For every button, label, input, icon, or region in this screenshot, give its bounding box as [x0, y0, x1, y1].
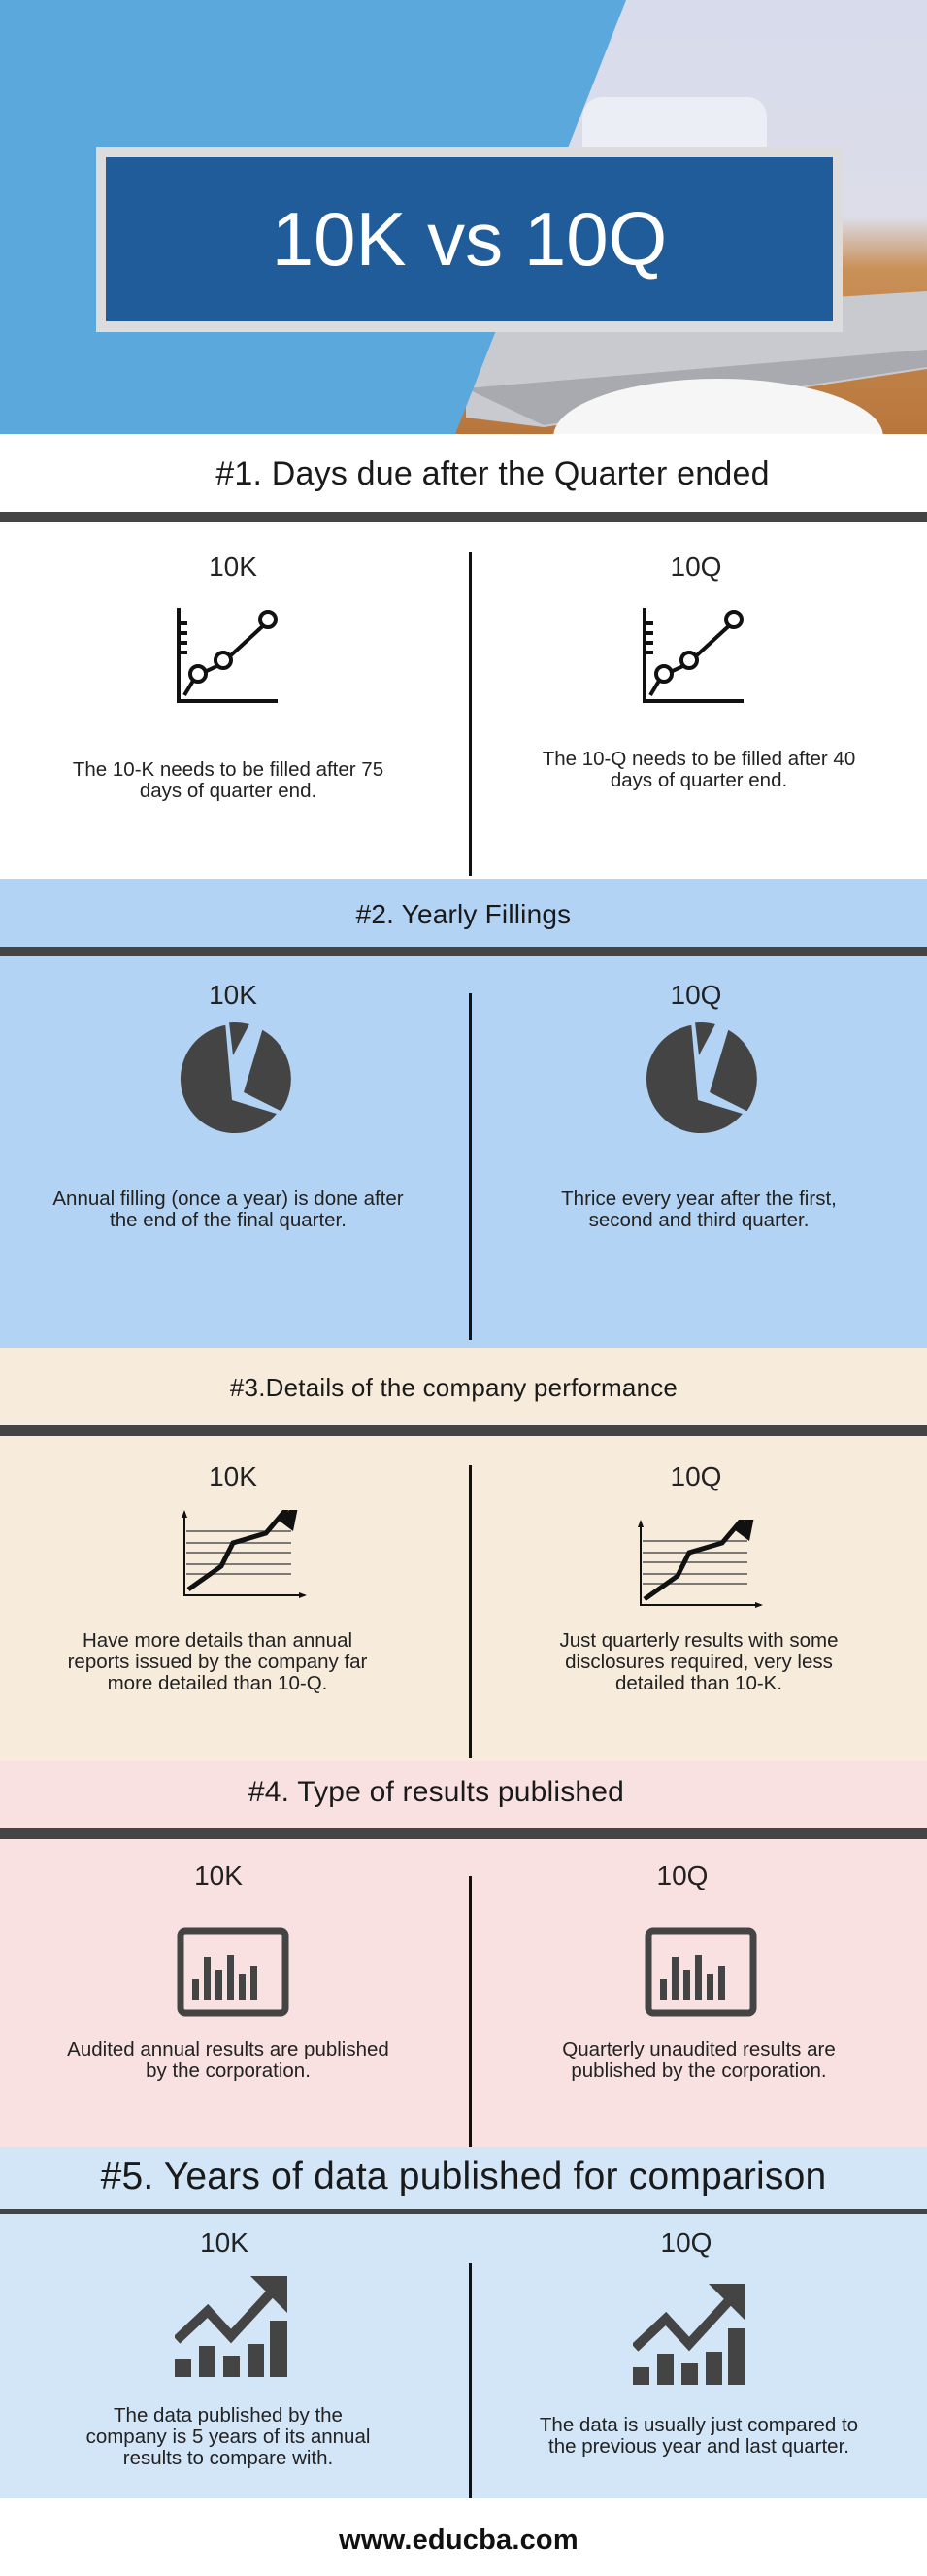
- text: 10K years: The data published by the: [114, 2404, 343, 2426]
- text: 10Q results: [562, 2038, 836, 2082]
- icon: trend arrow chart 10K: [182, 1510, 307, 1598]
- text: 10K days: days of quarter end.: [140, 780, 316, 802]
- panel: section 1 content: 10Q: [671, 552, 721, 582]
- text: #3.Details of the company performance: [230, 1373, 678, 1402]
- text: 10K days: The 10-K needs to be filled after 75: [73, 758, 383, 781]
- text: 10K days: [73, 758, 383, 802]
- text: 10Q details: Just quarterly results with some: [559, 1629, 839, 1652]
- icon: line chart 10Q: [643, 608, 744, 703]
- panel: section 4 content: 10K: [194, 1860, 243, 1890]
- icon: growth bars 10Q: [633, 2284, 745, 2385]
- panel: section 3 content: [0, 1436, 927, 1761]
- icon: growth bars 10K: [175, 2276, 287, 2377]
- icon: trend arrow chart 10Q: [638, 1520, 763, 1608]
- icon: line chart 10K: [177, 608, 278, 703]
- icon: pie 10K: [181, 1022, 291, 1133]
- panel: section 4 content: 10Q: [657, 1860, 708, 1890]
- panel: section 5 content: 10K: [200, 2227, 248, 2258]
- text: 10Q days: [543, 748, 855, 791]
- icon: pie 10Q: [646, 1022, 757, 1133]
- panel: section 2 content: 10K: [209, 980, 257, 1010]
- text: 10K yearly: [52, 1188, 404, 1231]
- text: 10K results: Audited annual results are published: [67, 2038, 389, 2060]
- text: 10K results: [67, 2038, 389, 2082]
- text: 10Q years: [540, 2414, 858, 2458]
- text: 10K years: company is 5 years of its annual: [86, 2425, 370, 2448]
- panel: section 3 content: 10Q: [671, 1461, 721, 1491]
- text: 10Q years: The data is usually just compared to: [540, 2414, 858, 2436]
- panel: section 5 content: [0, 2214, 927, 2498]
- text: 10Q details: disclosures required, very less: [565, 1651, 833, 1673]
- section 1 heading: #1. Days due after the Quarter ended: [215, 455, 770, 492]
- text: 10Q yearly: Thrice every year after the first,: [561, 1188, 837, 1210]
- panel: section 4 content: [0, 1839, 927, 2147]
- panel: section 1 content: [0, 522, 927, 879]
- text: 10Q yearly: [561, 1188, 837, 1231]
- text: 10K years: [86, 2404, 370, 2469]
- section 5 heading: [0, 2147, 927, 2209]
- text: #4. Type of results published: [248, 1776, 624, 1808]
- section 3 heading: [0, 1348, 927, 1425]
- title box: [96, 147, 843, 332]
- text: 10Q days: days of quarter end.: [611, 769, 787, 791]
- panel: section 1 content: 10K: [209, 552, 257, 582]
- panel: section 5 content: 10Q: [661, 2227, 712, 2258]
- text: 10K yearly: the end of the final quarter.: [110, 1209, 347, 1231]
- header: hero banner: [0, 0, 927, 434]
- footer: website: www.educba.com: [339, 2525, 579, 2556]
- text: #2. Yearly Fillings: [356, 899, 571, 929]
- text: 10K details: reports issued by the company far: [68, 1651, 367, 1673]
- text: 10K details: [68, 1629, 367, 1694]
- panel: section 2 content: 10Q: [671, 980, 721, 1010]
- text: 10Q yearly: second and third quarter.: [589, 1209, 809, 1231]
- text: #5. Years of data published for comparison: [101, 2156, 826, 2197]
- text: 10K details: more detailed than 10-Q.: [108, 1672, 327, 1694]
- text: 10Q days: The 10-Q needs to be filled after 40: [543, 748, 855, 770]
- text: 10K years: results to compare with.: [123, 2447, 333, 2469]
- text: 10Q years: the previous year and last quarter.: [548, 2435, 849, 2458]
- icon: monitor bars 10K: [177, 1928, 289, 2016]
- text: 10K details: Have more details than annual: [83, 1629, 352, 1652]
- section 2 heading: [0, 879, 927, 947]
- icon: monitor bars 10Q: [645, 1928, 757, 2016]
- text: 10Q results: Quarterly unaudited results are: [562, 2038, 836, 2060]
- text: 10K yearly: Annual filling (once a year) is done after: [52, 1188, 404, 1210]
- section 4 heading: [0, 1761, 927, 1828]
- text: 10K results: by the corporation.: [146, 2059, 311, 2082]
- text: 10Q details: [559, 1629, 839, 1694]
- panel: section 3 content: 10K: [209, 1461, 257, 1491]
- title box: 10K vs 10Q: [272, 196, 667, 282]
- text: 10Q details: detailed than 10-K.: [615, 1672, 782, 1694]
- panel: section 2 content: [0, 956, 927, 1348]
- text: 10Q results: published by the corporation.: [571, 2059, 827, 2082]
